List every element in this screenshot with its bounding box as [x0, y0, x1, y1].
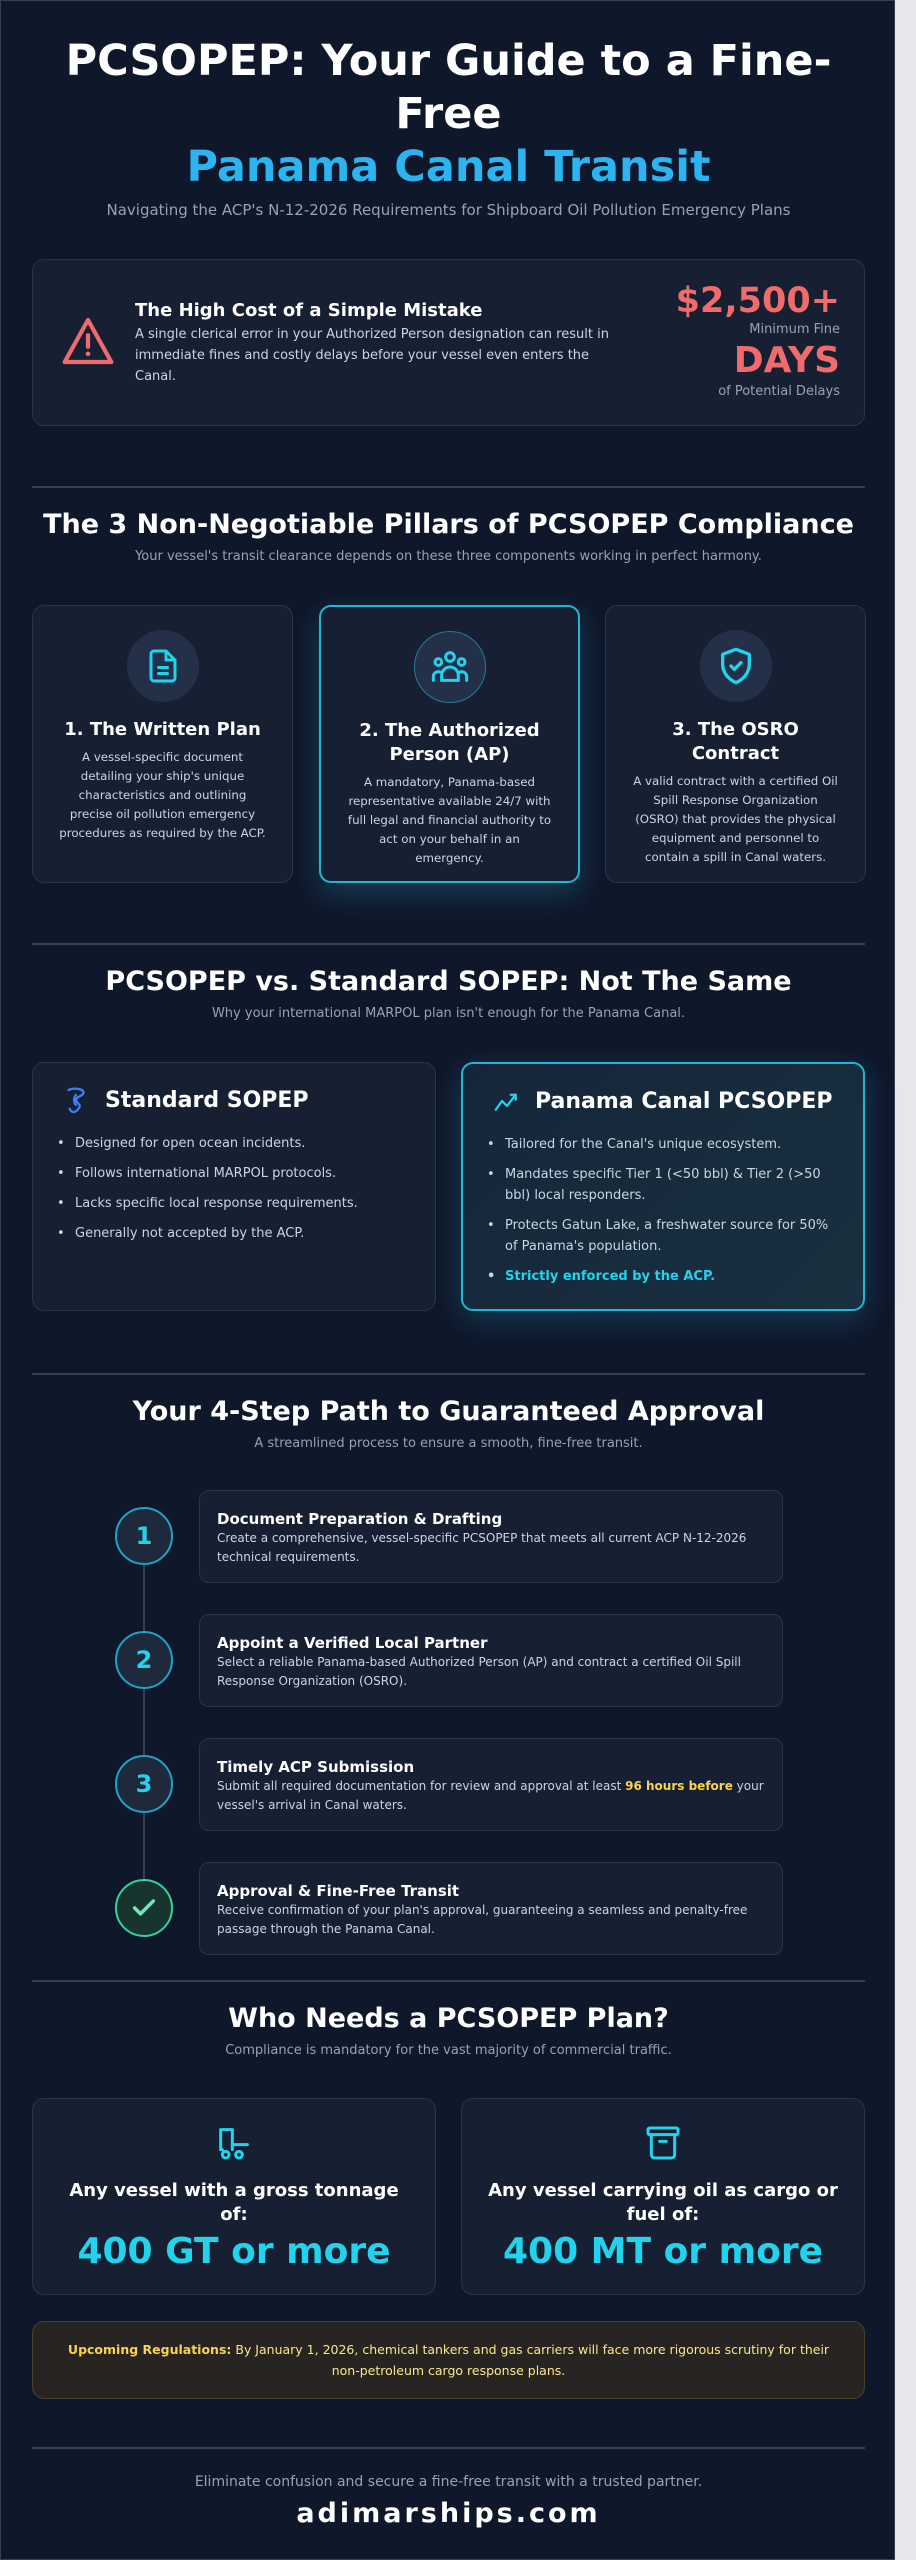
alert text: A single clerical error in your Authorized Person designation can result in immediate fines and costly delays before your vessel even enters the Canal.	[135, 327, 609, 384]
panel: Panama Canal PCSOPEP: Mandates specific Tier 1 (<50 bbl) & Tier 2 (>50 bbl) local responders.	[505, 1167, 821, 1203]
text: A streamlined process to ensure a smooth, fine-free transit.	[254, 1436, 643, 1451]
step 4: Approval & Fine-Free Transit	[217, 1882, 459, 1900]
panel: OSRO contract: 3. The OSRO Contract	[672, 719, 799, 764]
panel: standard SOPEP: Follows international MARPOL protocols.	[75, 1166, 336, 1181]
footer domain: adimarships.com	[296, 2498, 601, 2529]
panel: OSRO contract	[605, 605, 866, 883]
icon: people	[414, 631, 486, 703]
alert text: The High Cost of a Simple Mistake	[135, 300, 482, 321]
panel: Panama Canal PCSOPEP: Strictly enforced by the ACP.	[505, 1269, 715, 1284]
callout: upcoming regulations	[32, 2321, 865, 2399]
panel: Panama Canal PCSOPEP: Tailored for the Canal's unique ecosystem.	[505, 1137, 781, 1152]
panel: Panama Canal PCSOPEP	[461, 1062, 865, 1311]
panel: oil cargo: 400 MT or more	[503, 2231, 823, 2272]
stats: $2,500+	[676, 281, 840, 321]
timeline line	[143, 1536, 145, 1908]
panel: written plan: 1. The Written Plan	[64, 719, 261, 740]
heading: who needs: Who Needs a PCSOPEP Plan?	[228, 2003, 669, 2034]
icon: shield check	[700, 630, 772, 702]
step 3	[115, 1738, 783, 1831]
title: Panama Canal Transit	[186, 142, 711, 192]
panel: written plan: A vessel-specific document detailing your ship's unique characteristics and outlining precise oil pollution emergency procedures as required by the ACP.	[59, 750, 266, 840]
panel: standard SOPEP: Designed for open ocean incidents.	[75, 1136, 305, 1151]
footer text: Eliminate confusion and secure a fine-free transit with a trusted partner.	[195, 2474, 702, 2490]
step 1: Document Preparation & Drafting	[217, 1510, 502, 1528]
stats: DAYS	[734, 340, 840, 381]
panel: oil cargo	[461, 2098, 865, 2295]
icon: container	[646, 2126, 680, 2160]
panel: authorized person: 2. The Authorized Person (AP)	[359, 720, 540, 765]
icon: warning triangle	[62, 318, 114, 364]
alert text	[135, 300, 609, 384]
panel: gross tonnage: Any vessel with a gross tonnage of:	[69, 2180, 399, 2225]
panel: oil cargo: Any vessel carrying oil as cargo or fuel of:	[488, 2180, 838, 2225]
panel: authorized person: A mandatory, Panama-based representative available 24/7 with full legal and financial authority to act on your behalf in an emergency.	[348, 775, 551, 865]
text: Why your international MARPOL plan isn't enough for the Panama Canal.	[212, 1006, 685, 1021]
step 3: Timely ACP Submission	[217, 1758, 414, 1776]
heading: pillars: The 3 Non-Negotiable Pillars of PCSOPEP Compliance	[43, 509, 854, 540]
title	[66, 36, 831, 192]
panel: OSRO contract: A valid contract with a certified Oil Spill Response Organization (OSRO) that provides the physical equipment and personnel to contain a spill in Canal waters.	[633, 774, 838, 864]
step 4	[115, 1862, 783, 1955]
panel: high cost alert	[32, 259, 865, 426]
step 2	[115, 1614, 783, 1707]
heading: steps: Your 4-Step Path to Guaranteed Approval	[133, 1396, 764, 1427]
stats: of Potential Delays	[718, 384, 840, 399]
panel: standard SOPEP: Lacks specific local response requirements.	[75, 1196, 358, 1211]
panel: gross tonnage: 400 GT or more	[77, 2231, 391, 2272]
step 1	[115, 1490, 783, 1583]
heading: comparison: PCSOPEP vs. Standard SOPEP: Not The Same	[105, 966, 792, 997]
stats: Minimum Fine	[749, 322, 840, 337]
step 3: 3	[136, 1770, 152, 1798]
panel: authorized person	[319, 605, 580, 883]
panel: standard SOPEP	[32, 1062, 436, 1311]
heading with icon: Standard SOPEP	[105, 1088, 309, 1112]
subtitle: Navigating the ACP's N-12-2026 Requirements for Shipboard Oil Pollution Emergency Plans	[106, 201, 790, 219]
step 2: Appoint a Verified Local Partner	[217, 1634, 487, 1652]
panel: Panama Canal PCSOPEP: Protects Gatun Lake, a freshwater source for 50% of Panama's population.	[505, 1218, 828, 1254]
step 4: Receive confirmation of your plan's approval, guaranteeing a seamless and penalty-free passage through the Panama Canal.	[217, 1903, 747, 1936]
step 1: 1	[136, 1522, 152, 1550]
panel: written plan	[32, 605, 293, 883]
panel: gross tonnage	[32, 2098, 436, 2295]
icon: document	[126, 630, 198, 702]
callout: upcoming regulations: Upcoming Regulations: By January 1, 2026, chemical tankers and gas carriers will face more rigorous scrutiny for their non-petroleum cargo response plans.	[68, 2342, 829, 2378]
panel: standard SOPEP: Generally not accepted by the ACP.	[75, 1226, 304, 1241]
step 2: 2	[136, 1646, 152, 1674]
stats	[676, 281, 840, 399]
step 3: Submit all required documentation for review and approval at least 96 hours before your vessel's arrival in Canal waters.	[217, 1779, 764, 1812]
title: PCSOPEP: Your Guide to a Fine-Free	[66, 36, 831, 139]
step 2: Select a reliable Panama-based Authorized Person (AP) and contract a certified Oil Spill Response Organization (OSRO).	[217, 1655, 741, 1688]
text: Your vessel's transit clearance depends on these three components working in perfect harmony.	[135, 549, 762, 564]
step 1: Create a comprehensive, vessel-specific PCSOPEP that meets all current ACP N-12-2026 technical requirements.	[217, 1531, 746, 1564]
text: Compliance is mandatory for the vast majority of commercial traffic.	[225, 2043, 672, 2058]
heading with icon: Panama Canal PCSOPEP	[535, 1088, 833, 1114]
icon: truck	[219, 2128, 249, 2160]
